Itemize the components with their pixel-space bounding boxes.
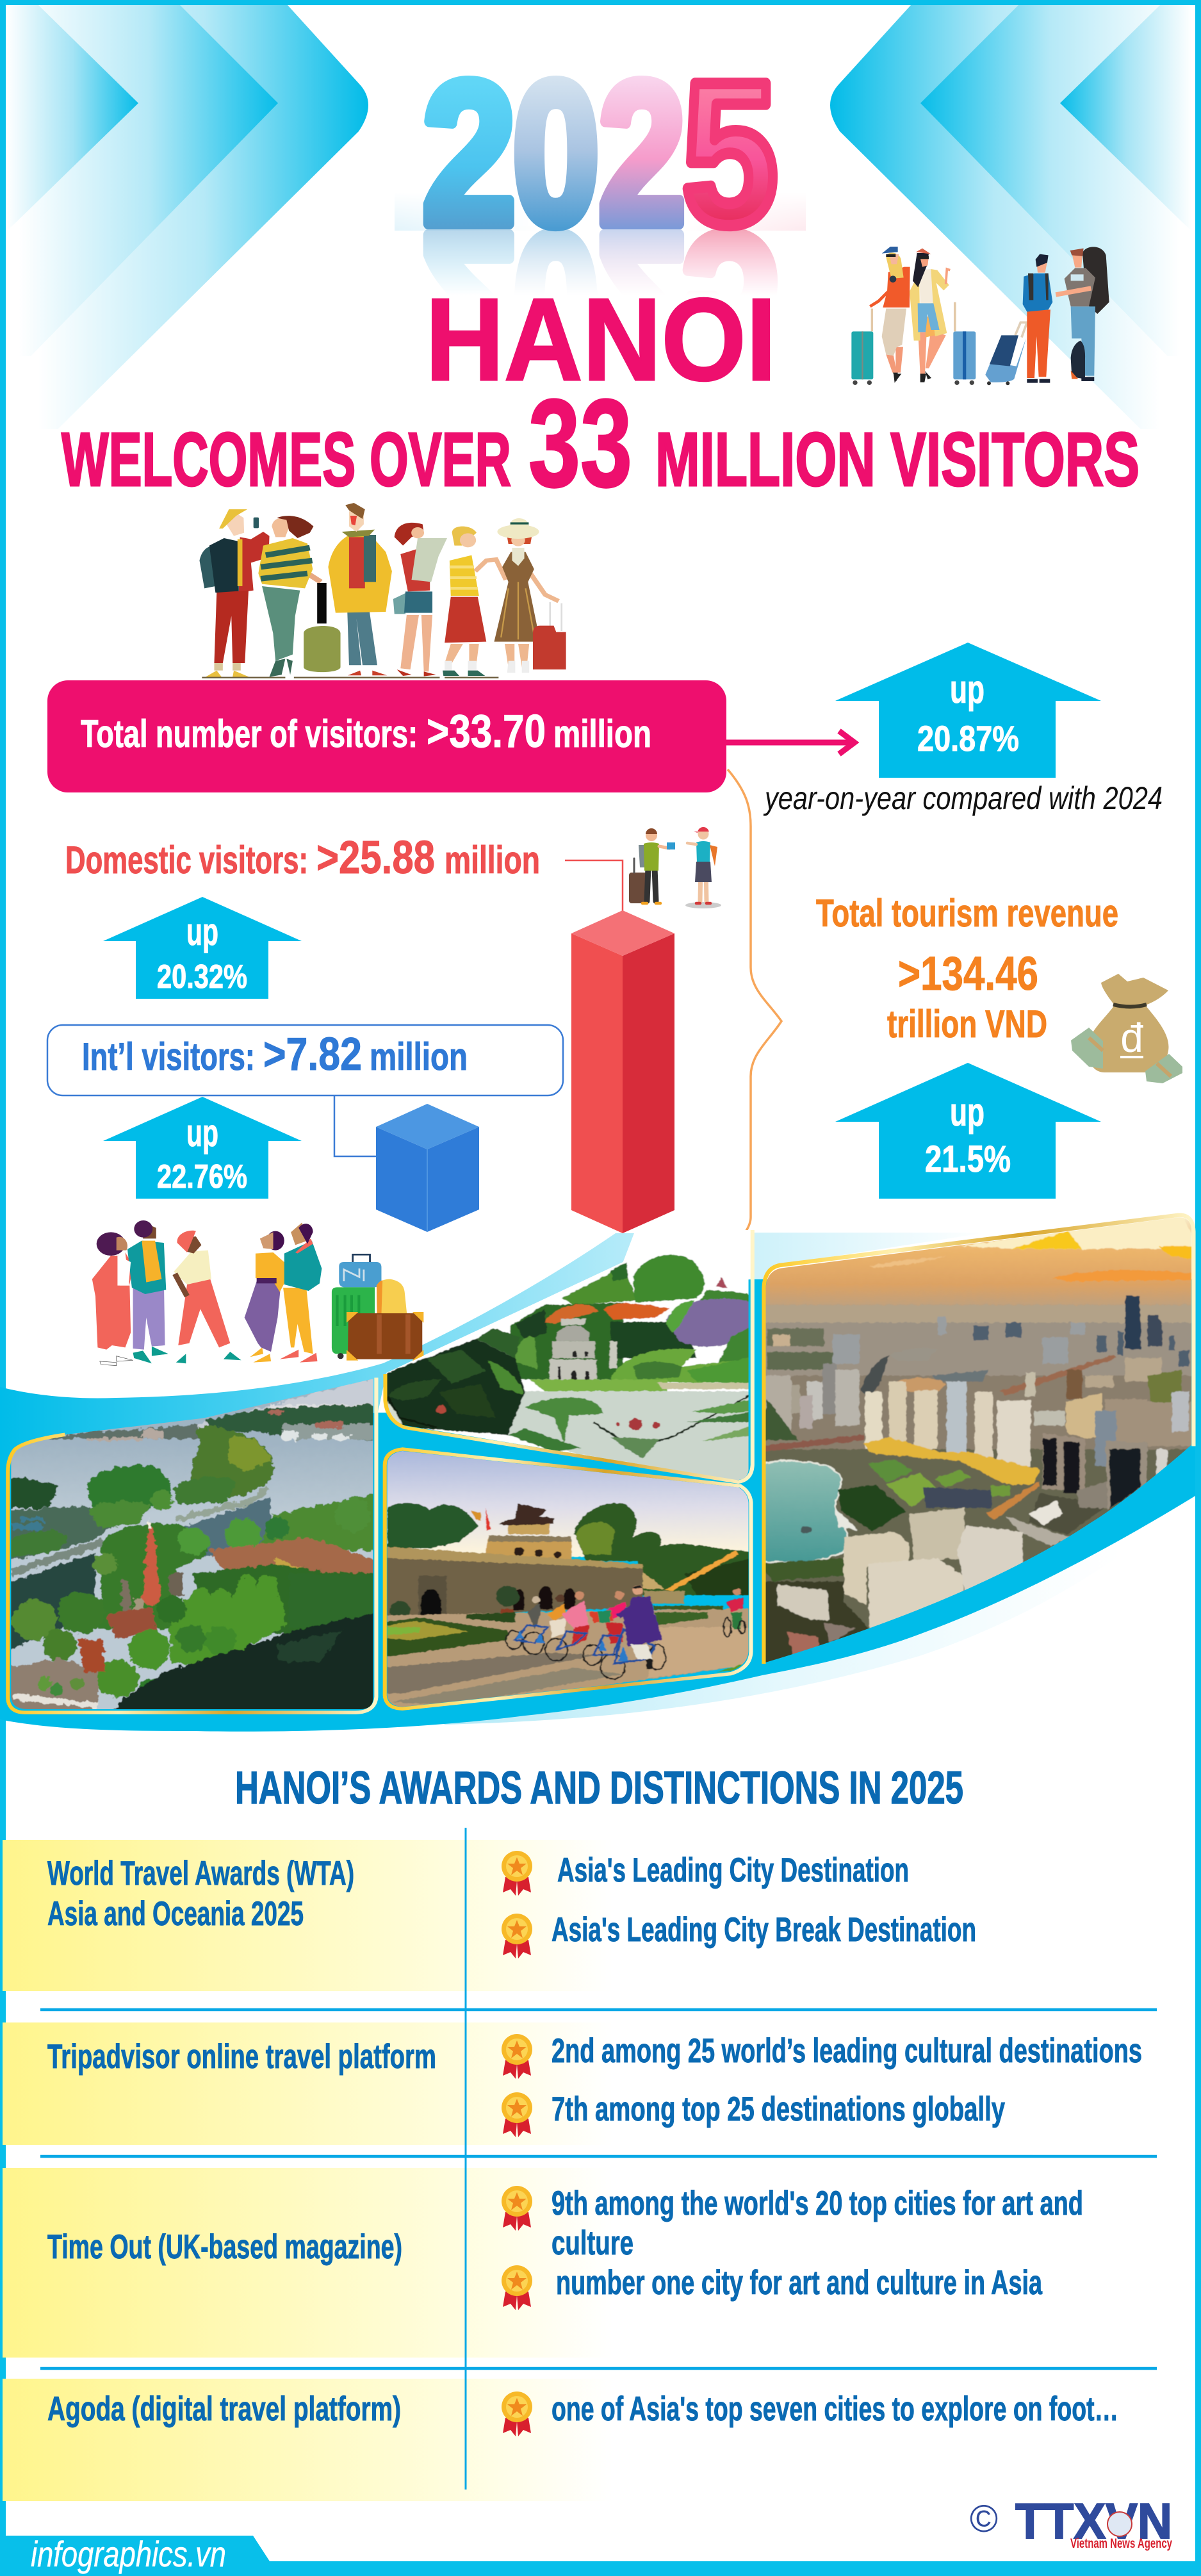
label: domestic visitors: million [445,839,540,882]
connector: domestic label to bar [565,860,623,933]
up arrow: total visitors growth [835,643,1101,778]
row: Tripadvisor [47,2032,1142,2137]
swoosh: light tail [445,1473,1195,1725]
footer strip and source: infographics.vn [31,2534,226,2574]
row: World Travel Awards: Asia's Leading City Break Destination [551,1911,976,1949]
right chevron decoration [830,5,1198,429]
table row backgrounds [3,1840,613,2501]
photo: Thang Long Imperial Citadel with cyclists [375,1440,765,1715]
up arrow: domestic growth: up [186,910,218,953]
row: Agoda: Agoda (digital travel platform) [47,2390,401,2428]
label: international visitors [47,1025,563,1095]
row: Time Out: Time Out (UK-based magazine) [47,2228,402,2266]
up arrow: revenue growth: 21.5% [925,1138,1011,1180]
connector: international label to bar [334,1095,377,1156]
logo: TTXVN copyright: © [970,2497,998,2540]
icon: money bag: đ [1120,1015,1143,1061]
up arrow: revenue growth [835,1063,1101,1199]
illustration: international visitors with luggage [92,1220,422,1366]
bar: international visitors [376,1104,479,1232]
year 2025 3D numerals with reflection: 2 [598,192,686,419]
panel: total number of visitors: Total number of visitors: [81,712,418,755]
label: international visitors: Int’l visitors: [82,1035,255,1078]
photo: Hanoi skyline at sunset [753,1208,1201,1673]
up arrow: domestic growth [103,897,302,999]
subtitle: welcomes over 33 million visitors: 33 [528,373,632,513]
bracket connector [728,769,781,1252]
panel: total number of visitors: >33.70 [427,706,546,757]
year 2025 3D numerals with reflection [395,76,806,288]
bar: domestic visitors [571,910,674,1233]
illustration: travellers with suitcases, top right [851,247,1109,385]
footer strip and source [0,2534,1201,2576]
up arrow: international growth: 22.76% [157,1158,247,1195]
revenue text [816,892,1118,1046]
swoosh: cyan backdrop [0,1279,1195,1732]
year 2025 3D numerals with reflection: 5 [682,192,778,419]
swoosh: gradient band [0,1233,662,1467]
row: World Travel Awards [47,1851,976,1958]
year 2025 3D numerals with reflection: 0 [512,192,600,419]
label: international visitors: >7.82 [263,1029,362,1080]
up arrow: international growth: up [186,1112,218,1154]
label: domestic visitors [65,832,540,883]
icon: money bag [1071,974,1182,1083]
subtitle: welcomes over 33 million visitors [61,373,1140,513]
up arrow: revenue growth: up [950,1090,984,1135]
revenue text: trillion VND [887,1003,1047,1046]
revenue text: >134.46 [898,947,1038,1000]
up arrow: total visitors growth: up [950,668,984,712]
year 2025 3D numerals with reflection: 2 [598,40,686,267]
row: Tripadvisor: Tripadvisor online travel platform [47,2038,436,2076]
year 2025 3D numerals with reflection: 0 [512,40,600,267]
up arrow: domestic growth: 20.32% [157,958,247,996]
panel: total number of visitors [47,680,726,792]
row: Time Out: culture [551,2224,633,2262]
logo: TTXVN copyright: TTXVN [1015,2493,1172,2549]
illustration: group of six tourists [199,503,566,678]
panel: total number of visitors: million [553,712,651,755]
left chevron decoration [0,5,368,429]
label: international visitors: million [370,1035,468,1078]
row: Tripadvisor: 7th among top 25 destinations globally [551,2090,1005,2128]
year 2025 3D numerals with reflection: 5 [682,40,778,267]
photo: Turtle Tower on Hoan Kiem Lake [383,1230,755,1484]
arrow: total to growth [726,731,854,754]
subtitle: welcomes over 33 million visitors: WELCOMES OVER [61,417,511,502]
table lines [40,1828,1157,2490]
up arrow: total visitors growth: 20.87% [917,718,1019,759]
row: Time Out [47,2185,1083,2310]
photo: Tran Quoc pagoda on West Lake [6,1377,378,1714]
row: Agoda [47,2390,1118,2436]
year 2025 3D numerals with reflection: 2 [422,192,516,419]
row: World Travel Awards: Asia and Oceania 2025 [47,1895,304,1933]
row: World Travel Awards: Asia's Leading City Destination [557,1851,909,1889]
illustration: couple of tourists [629,827,721,908]
year 2025 3D numerals with reflection: 2 [422,40,516,267]
up arrow: international growth [103,1097,302,1199]
title: HANOI: HANOI [425,274,776,405]
row: World Travel Awards: World Travel Awards (WTA) [47,1855,354,1892]
label: domestic visitors: >25.88 [316,832,435,883]
swoosh: pale strip above city photo [753,1233,986,1279]
label: domestic visitors: Domestic visitors: [65,839,308,882]
